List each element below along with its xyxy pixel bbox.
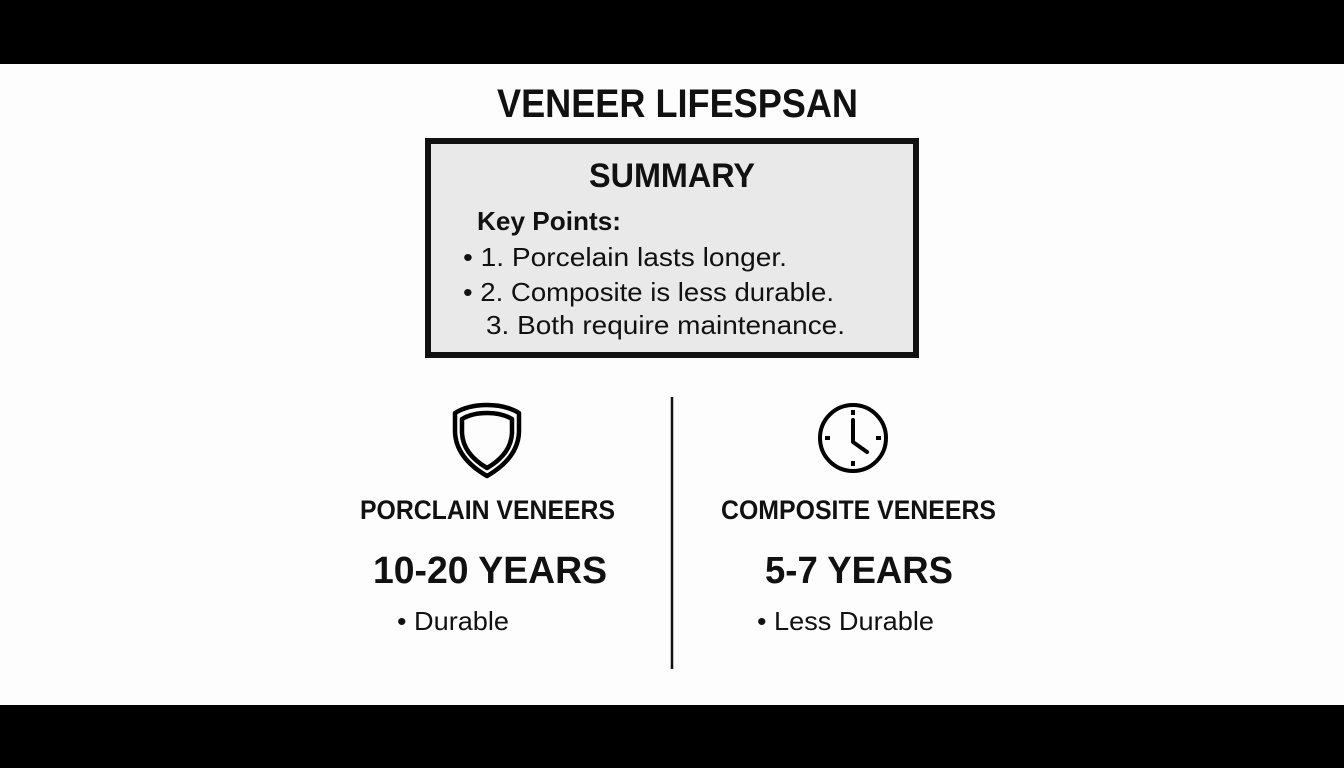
key point 2: • 2. Composite is less durable. [463,277,834,307]
key points heading: Key Points: [477,206,621,236]
summary heading: SUMMARY [589,157,755,195]
key point 1: • 1. Porcelain lasts longer. [463,242,787,272]
panel: composite [721,405,996,636]
icon: clock [820,405,886,471]
composite label: COMPOSITE VENEERS [721,495,996,525]
panel: summary [428,141,916,355]
porcelain label: PORCLAIN VENEERS [360,495,615,525]
composite years: 5-7 YEARS [765,550,953,592]
composite bullet: • Less Durable [757,606,934,636]
icon: shield [455,405,519,476]
divider [671,397,673,669]
porcelain years: 10-20 YEARS [373,550,607,592]
porcelain bullet: • Durable [397,606,509,636]
panel: porcelain [360,405,615,636]
title: VENEER LIFESPSAN [497,82,858,126]
key point 3: 3. Both require maintenance. [486,310,845,340]
